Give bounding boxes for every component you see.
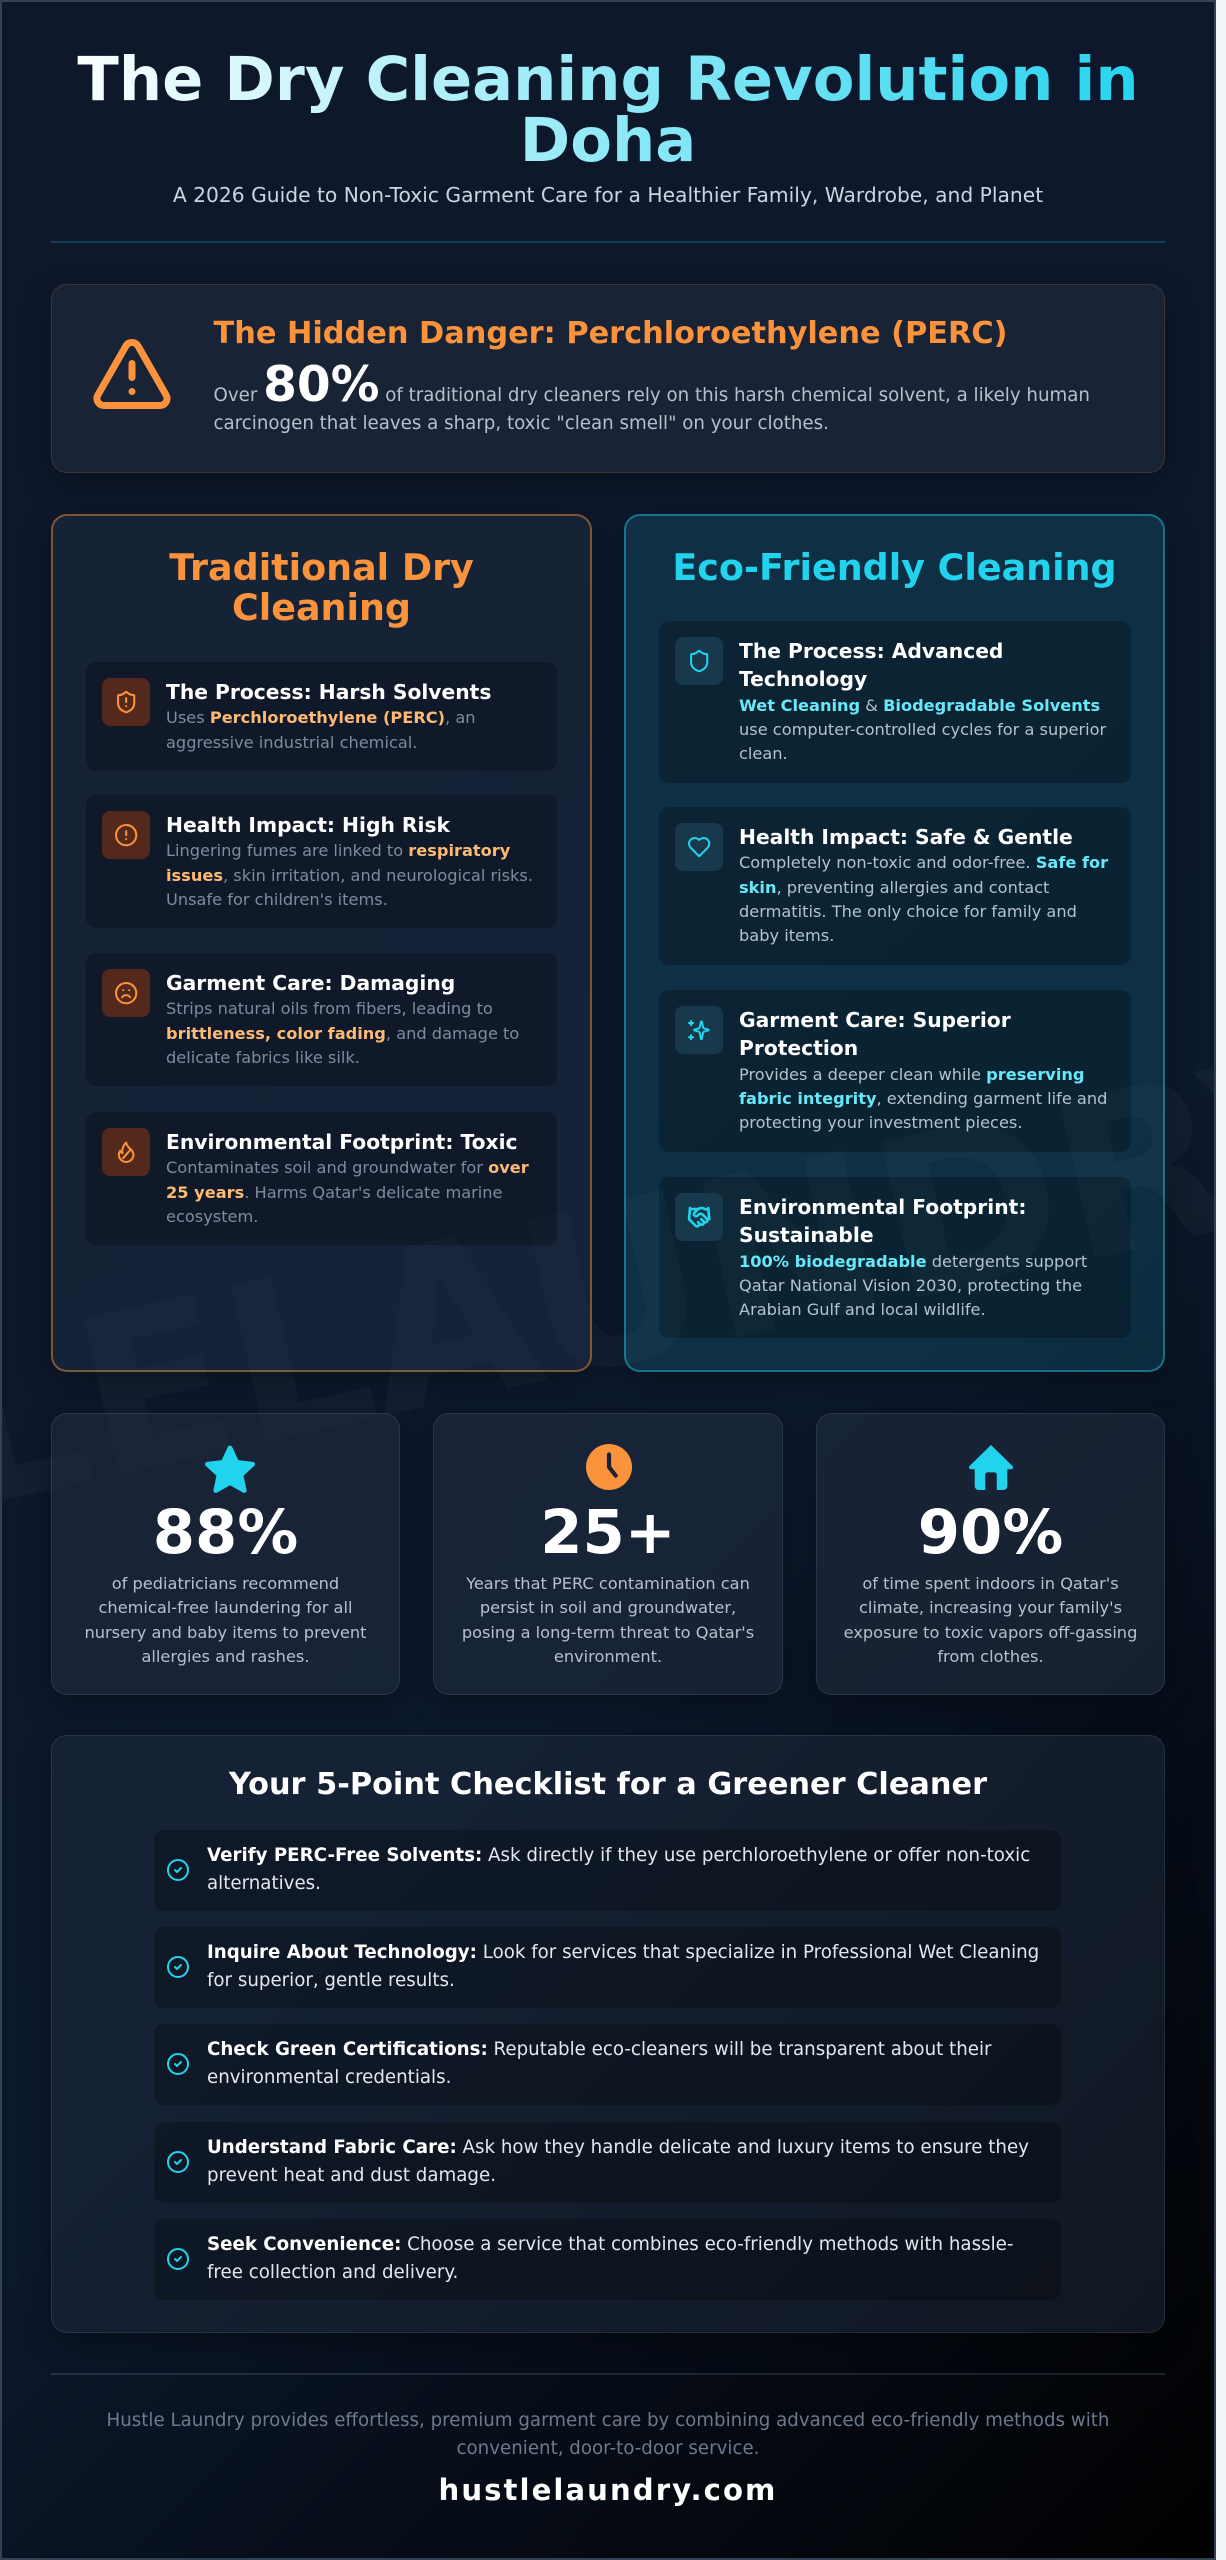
- stat card: 25+: [433, 1413, 783, 1695]
- text: health impact: Unsafe for children's items.: [166, 890, 388, 909]
- panel: traditional dry cleaning: [51, 514, 592, 1372]
- text: environmental footprint: Arabian Gulf and local wildlife.: [739, 1300, 986, 1319]
- text: seek convenience: [207, 2234, 1013, 2283]
- text: verify perc-free: [207, 1845, 1030, 1894]
- text: fabric care: [207, 2137, 1029, 2186]
- item: the process: [659, 621, 1131, 783]
- text: environmental footprint: [739, 1195, 1087, 1319]
- text: pediatricians: chemical-free laundering for all: [99, 1598, 352, 1617]
- text: inquire about technology: for superior, gentle results.: [207, 1970, 455, 1991]
- icon: frown: [102, 969, 150, 1017]
- icon: shield: [675, 637, 723, 685]
- icon: sparkles: [675, 1006, 723, 1054]
- title: [51, 50, 1165, 172]
- heading: hidden danger: The Hidden Danger: Perchloroethylene (PERC): [214, 316, 1008, 351]
- text: 80% statistic: carcinogen that leaves a sharp, toxic "clean smell" on your clothes.: [214, 413, 829, 434]
- icon: warning triangle: [93, 339, 171, 409]
- text: the process: [166, 680, 491, 752]
- icon: handshake: [675, 1193, 723, 1241]
- text: fabric care: prevent heat and dust damage.: [207, 2165, 496, 2186]
- text: the process: The Process: Harsh Solvents: [166, 680, 491, 704]
- footer text: Hustle Laundry provides effortless, premium garment care by combining advanced eco-friendly methods with: [107, 2410, 1109, 2431]
- icon: clock: [586, 1444, 632, 1490]
- heading: traditional dry cleaning: Traditional Dry: [169, 546, 474, 588]
- text: the process: aggressive industrial chemical.: [166, 733, 417, 752]
- heading: eco-friendly cleaning: Eco-Friendly Cleaning: [672, 546, 1117, 588]
- text: inquire about technology: Inquire About Technology: Look for services that specialize in Professional Wet Cleaning: [207, 1942, 1039, 1963]
- text: environmental footprint: Sustainable: [739, 1223, 874, 1247]
- icon: house: [969, 1445, 1013, 1490]
- footer text: [107, 2410, 1109, 2459]
- text: green certifications: environmental credentials.: [207, 2067, 451, 2088]
- icon: check circle: [167, 1956, 189, 1978]
- text: pediatricians: nursery and baby items to prevent: [84, 1623, 366, 1642]
- text: green certifications: [207, 2039, 992, 2088]
- icon: alert circle: [102, 811, 150, 859]
- text: health impact: [739, 825, 1108, 945]
- icon: star: [205, 1446, 255, 1493]
- number: 90%: 90%: [918, 1498, 1063, 1568]
- text: verify perc-free: alternatives.: [207, 1873, 321, 1894]
- text: environmental footprint: 100% biodegradable detergents support: [739, 1252, 1087, 1271]
- text: perc contamination: persist in soil and groundwater,: [480, 1598, 736, 1617]
- item: health impact: [659, 807, 1131, 965]
- stat card: 90%: [816, 1413, 1165, 1695]
- text: garment care: Garment Care: Superior: [739, 1008, 1011, 1032]
- checklist item 4: [154, 2122, 1061, 2203]
- text: the process: Uses Perchloroethylene (PERC), an: [166, 708, 476, 727]
- item: garment care: [659, 990, 1131, 1152]
- text: the process: Wet Cleaning & Biodegradable Solvents: [739, 696, 1100, 715]
- icon: check circle: [167, 1859, 189, 1881]
- panel: eco-friendly cleaning: [624, 514, 1165, 1372]
- text: garment care: delicate fabrics like silk.: [166, 1048, 360, 1067]
- text: pediatricians: allergies and rashes.: [142, 1647, 309, 1666]
- text: time indoors: exposure to toxic vapors off-gassing: [844, 1623, 1137, 1642]
- text: health impact: Health Impact: Safe & Gentle: [739, 825, 1073, 849]
- text: time indoors: from clothes.: [937, 1647, 1044, 1666]
- text: environmental footprint: Qatar National Vision 2030, protecting the: [739, 1276, 1082, 1295]
- text: garment care: brittleness, color fading, and damage to: [166, 1024, 519, 1043]
- icon: flame: [102, 1128, 150, 1176]
- text: the process: [739, 639, 1106, 763]
- icon: check circle: [167, 2151, 189, 2173]
- stat card: 88%: [51, 1413, 400, 1695]
- text: seek convenience: free collection and delivery.: [207, 2262, 458, 2283]
- checklist item 1: [154, 1830, 1061, 1911]
- item: the process: [86, 662, 557, 771]
- panel: hidden danger callout: [51, 284, 1165, 473]
- footer text: convenient, door-to-door service.: [457, 2438, 759, 2459]
- text: time indoors: [844, 1574, 1137, 1666]
- item: environmental footprint: [659, 1177, 1131, 1338]
- text: garment care: [166, 971, 519, 1067]
- text: the process: Technology: [739, 667, 867, 691]
- text: environmental footprint: ecosystem.: [166, 1207, 258, 1226]
- item: garment care: [86, 953, 557, 1086]
- text: inquire about technology: [207, 1942, 1039, 1991]
- footer url: hustlelaundry.com: [439, 2473, 777, 2507]
- text: pediatricians: of pediatricians recommend: [112, 1574, 339, 1593]
- text: green certifications: Check Green Certifications: Reputable eco-cleaners will be transparent about their: [207, 2039, 992, 2060]
- title: Doha: [520, 106, 696, 176]
- heading: traditional dry cleaning: [169, 546, 474, 628]
- item: health impact: [86, 795, 557, 928]
- icon: check circle: [167, 2248, 189, 2270]
- number: 25+: 25+: [540, 1498, 676, 1568]
- text: the process: use computer-controlled cycles for a superior: [739, 720, 1106, 739]
- text: environmental footprint: Contaminates soil and groundwater for over: [166, 1158, 529, 1177]
- checklist item 5: [154, 2219, 1061, 2300]
- text: verify perc-free: Verify PERC-Free Solvents: Ask directly if they use perchloroethylene or offer non-toxic: [207, 1845, 1030, 1866]
- text: fabric care: Understand Fabric Care: Ask how they handle delicate and luxury items to ensure they: [207, 2137, 1029, 2158]
- item: environmental footprint: [86, 1112, 557, 1245]
- text: 80% statistic: Over 80% of traditional dry cleaners rely on this harsh chemical solvent, a likely human: [214, 356, 1090, 412]
- number: 88%: 88%: [153, 1498, 298, 1568]
- text: environmental footprint: 25 years. Harms Qatar's delicate marine: [166, 1183, 503, 1202]
- text: pediatricians: [84, 1574, 366, 1666]
- checklist item 3: [154, 2024, 1061, 2105]
- text: garment care: Garment Care: Damaging: [166, 971, 455, 995]
- text: health impact: baby items.: [739, 926, 834, 945]
- text: perc contamination: [462, 1574, 754, 1666]
- text: health impact: [166, 813, 533, 909]
- text: environmental footprint: Environmental Footprint:: [739, 1195, 1026, 1219]
- text: environmental footprint: Environmental Footprint: Toxic: [166, 1130, 518, 1154]
- subtitle: A 2026 Guide to Non-Toxic Garment Care for a Healthier Family, Wardrobe, and Planet: [173, 182, 1043, 206]
- icon: heart: [675, 823, 723, 871]
- text: time indoors: climate, increasing your family's: [859, 1598, 1122, 1617]
- icon: shield alert: [102, 678, 150, 726]
- text: the process: clean.: [739, 744, 788, 763]
- text: garment care: Protection: [739, 1036, 858, 1060]
- text: health impact: Health Impact: High Risk: [166, 813, 450, 837]
- text: seek convenience: Seek Convenience: Choose a service that combines eco-friendly methods with hassle-: [207, 2234, 1013, 2255]
- text: garment care: Strips natural oils from fibers, leading to: [166, 999, 493, 1018]
- text: time indoors: of time spent indoors in Qatar's: [862, 1574, 1119, 1593]
- text: the process: The Process: Advanced: [739, 639, 1003, 663]
- text: health impact: dermatitis. The only choice for family and: [739, 902, 1077, 921]
- text: perc contamination: Years that PERC contamination can: [466, 1574, 750, 1593]
- text: health impact: Completely non-toxic and odor-free. Safe for: [739, 853, 1108, 872]
- heading: traditional dry cleaning: Cleaning: [232, 586, 411, 628]
- text: perc contamination: posing a long-term threat to Qatar's: [462, 1623, 754, 1642]
- icon: check circle: [167, 2053, 189, 2075]
- text: garment care: Provides a deeper clean while preserving: [739, 1065, 1085, 1084]
- checklist item 2: [154, 1927, 1061, 2008]
- text: perc contamination: environment.: [554, 1647, 662, 1666]
- text: garment care: [739, 1008, 1107, 1132]
- heading: checklist: Your 5-Point Checklist for a Greener Cleaner: [229, 1767, 987, 1802]
- text: health impact: issues, skin irritation, and neurological risks.: [166, 866, 533, 885]
- text: health impact: Lingering fumes are linked to respiratory: [166, 841, 510, 860]
- text: garment care: protecting your investment pieces.: [739, 1113, 1022, 1132]
- text: environmental footprint: [166, 1130, 529, 1226]
- text: health impact: skin, preventing allergies and contact: [739, 878, 1049, 897]
- title: The Dry Cleaning Revolution in: [77, 45, 1139, 115]
- panel: checklist: [51, 1735, 1165, 2333]
- text: garment care: fabric integrity, extending garment life and: [739, 1089, 1107, 1108]
